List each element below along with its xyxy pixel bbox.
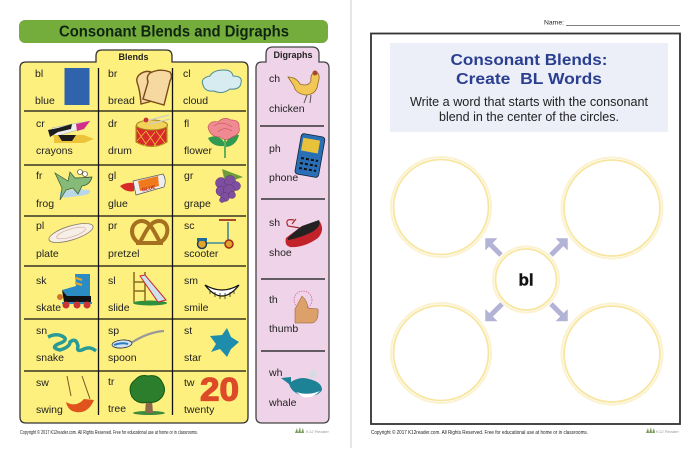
icon: phone	[295, 133, 325, 178]
row: pl pr sc: pretzel	[108, 248, 140, 260]
arrow: up right	[551, 238, 568, 255]
icon: flower	[208, 118, 239, 158]
digraph labels	[268, 73, 305, 409]
panel: digraphs: Digraphs	[273, 50, 313, 60]
title bar	[19, 20, 328, 43]
icon: skate	[57, 274, 92, 308]
panel: blends	[20, 50, 248, 423]
digraph labels: chicken	[269, 103, 305, 115]
icon: slide	[133, 272, 167, 306]
row: cr dr fl: crayons	[36, 145, 73, 157]
icon: twenty: 20	[200, 372, 239, 408]
row: cr dr fl: drum	[108, 145, 132, 157]
center circle: bl	[518, 270, 534, 290]
title bar: Consonant Blends and Digraphs	[59, 24, 289, 40]
circle: top left	[391, 157, 491, 257]
row: fr gl gr: gr	[184, 170, 194, 182]
row: sn sp st	[36, 325, 202, 364]
row: cr dr fl: cr	[36, 118, 45, 130]
logo: left	[295, 427, 330, 434]
row: sw tr tw	[36, 376, 215, 416]
digraph labels: th	[269, 294, 278, 306]
row: sw tr tw: tree	[108, 403, 126, 415]
row: fr gl gr: fr	[36, 170, 43, 182]
worksheet title: Create BL Words	[456, 71, 602, 88]
icon: chicken	[288, 70, 319, 103]
heading box	[390, 43, 668, 132]
row: sk sl sm: smile	[184, 302, 209, 314]
worksheet title	[450, 52, 608, 88]
circle: bottom right	[562, 304, 662, 404]
icon: swing	[66, 376, 94, 412]
row: cr dr fl	[36, 118, 213, 157]
row: cr dr fl: flower	[184, 145, 213, 157]
row: pl pr sc: plate	[36, 248, 59, 260]
instructions: Write a word that starts with the consonant	[410, 94, 648, 109]
arrow: down right	[551, 304, 568, 321]
worksheet frame	[371, 34, 680, 424]
digraph labels: ch	[269, 73, 280, 85]
row: pl pr sc: pr	[108, 220, 118, 232]
icon: glue: GLUE	[141, 184, 157, 194]
row: pl pr sc: sc	[184, 220, 194, 232]
row: cr dr fl: fl	[184, 118, 189, 130]
row: sw tr tw: tw	[184, 377, 195, 389]
circle: top right	[562, 158, 662, 258]
row: sn sp st: spoon	[108, 352, 137, 364]
row: bl br cl: blue	[35, 95, 55, 107]
panel: blends: Blends	[118, 52, 149, 62]
panel: digraphs	[256, 47, 329, 423]
circle: bottom left	[391, 303, 491, 403]
icon: bread	[137, 70, 172, 105]
arrow: down left	[486, 304, 502, 321]
row: sn sp st: star	[184, 352, 202, 364]
instructions	[410, 94, 648, 124]
digraph labels: ph	[269, 143, 281, 155]
digraph labels: wh	[268, 367, 283, 379]
icon: scooter	[197, 220, 236, 248]
row: bl br cl: cl	[183, 68, 191, 80]
center circle	[493, 246, 559, 312]
row: bl br cl	[35, 68, 208, 107]
row: sk sl sm: sm	[184, 275, 198, 287]
digraph labels: shoe	[269, 247, 292, 259]
row: fr gl gr: glue	[108, 198, 128, 210]
icon: grape	[216, 169, 243, 202]
icon: thumb	[294, 291, 318, 323]
row: sn sp st: sn	[36, 325, 47, 337]
name line: Name:	[544, 20, 564, 26]
arrow: up left	[486, 238, 501, 255]
row: fr gl gr: frog	[36, 198, 54, 210]
row: sk sl sm	[36, 275, 209, 314]
worksheet title: Consonant Blends:	[450, 52, 608, 69]
icon: pretzel	[132, 221, 167, 243]
digraph labels: sh	[269, 217, 280, 229]
logo: left: K12 Reader	[306, 429, 330, 434]
name line	[544, 20, 680, 26]
icon: crayons	[48, 121, 94, 143]
row: sn sp st: sp	[108, 325, 119, 337]
icon: blue rectangle	[64, 68, 90, 105]
icon: drum	[136, 115, 170, 146]
icon: cloud	[202, 70, 241, 93]
row: fr gl gr: grape	[184, 198, 211, 210]
footer: right copyright: Copyright © 2017 K12reader.com. All Rights Reserved. Free for educational use at home or in classrooms.	[371, 429, 588, 436]
row: sk sl sm: skate	[36, 302, 61, 314]
row: pl pr sc: pl	[36, 220, 44, 232]
icon: star	[210, 328, 239, 357]
row: sw tr tw: tr	[108, 376, 115, 388]
row: cr dr fl: dr	[108, 118, 118, 130]
digraph labels: phone	[269, 172, 298, 184]
logo: right: K12 Reader	[656, 429, 680, 434]
row: sw tr tw: sw	[36, 377, 49, 389]
icon: plate	[47, 220, 95, 246]
row: fr gl gr	[36, 170, 211, 210]
row: bl br cl: bl	[35, 68, 43, 80]
instructions: blend in the center of the circles.	[439, 109, 619, 124]
icon: smile	[205, 285, 239, 299]
row: fr gl gr: gl	[108, 170, 116, 182]
logo: right	[646, 427, 680, 434]
icon: shoe	[286, 219, 322, 247]
row: bl br cl: cloud	[183, 95, 208, 107]
icon: glue	[120, 174, 165, 195]
row: bl br cl: bread	[108, 95, 135, 107]
icon: frog	[55, 170, 92, 200]
row: sk sl sm: sl	[108, 275, 116, 287]
row: pl pr sc	[36, 220, 219, 260]
icon: tree	[130, 376, 165, 415]
icon: whale	[281, 370, 322, 397]
row: bl br cl: br	[108, 68, 118, 80]
row: sk sl sm: slide	[108, 302, 130, 314]
icon: spoon	[112, 331, 164, 349]
row: sw tr tw: swing	[36, 404, 63, 416]
digraph labels: thumb	[269, 323, 298, 335]
row: pl pr sc: scooter	[184, 248, 219, 260]
row: sw tr tw: twenty	[184, 404, 215, 416]
row: sn sp st: st	[184, 325, 192, 337]
footer: left copyright: Copyright © 2017 K12reader.com. All Rights Reserved. Free for educational use at home or in classrooms.	[20, 429, 198, 436]
row: sn sp st: snake	[36, 352, 64, 364]
digraph labels: whale	[268, 397, 297, 409]
icon: snake	[48, 335, 96, 351]
row: sk sl sm: sk	[36, 275, 47, 287]
